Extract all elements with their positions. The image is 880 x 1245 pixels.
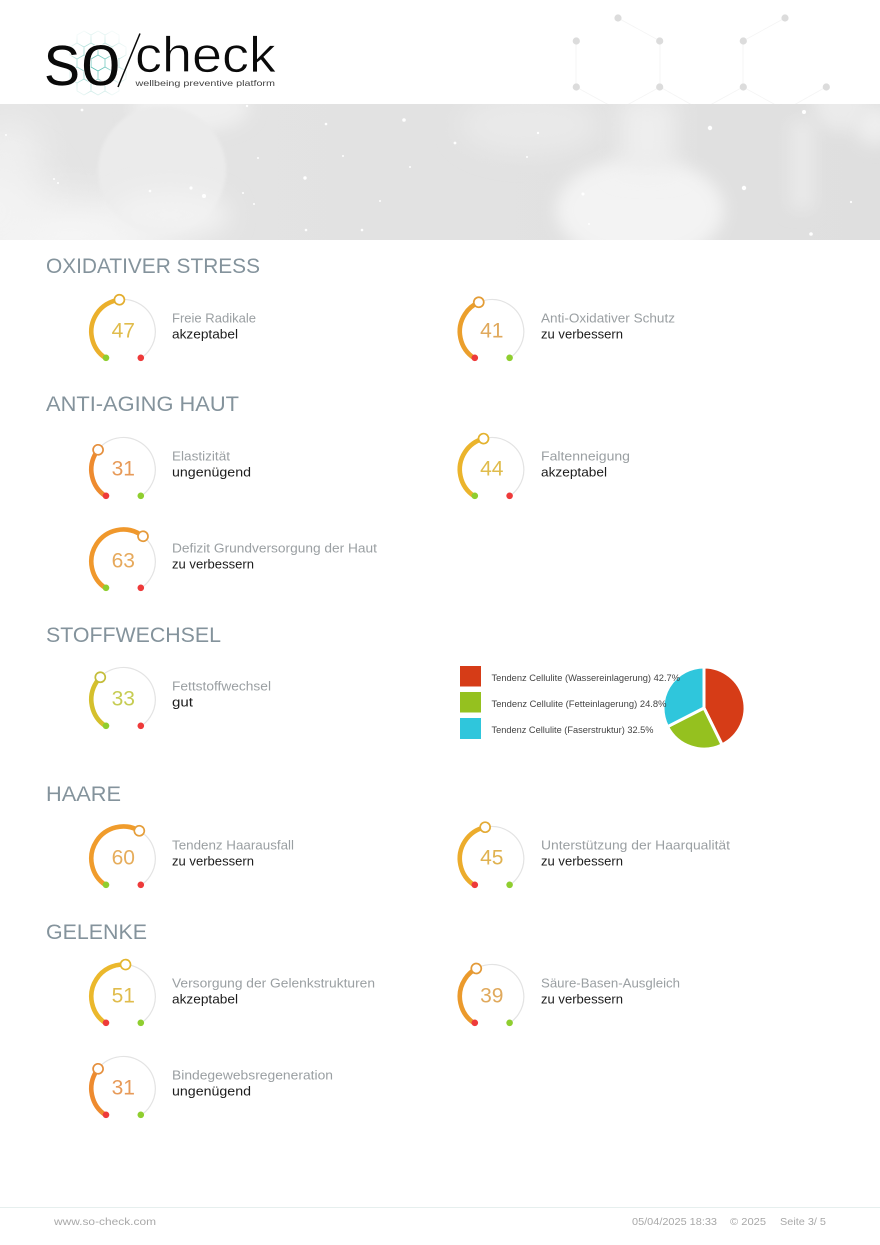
legend: Tendenz Cellulite: Tendenz Cellulite (Faserstruktur) 32.5% — [492, 725, 654, 735]
gauge: Fettstoffwechsel 33: gut — [172, 696, 194, 710]
heading: OXIDATIVER STRESS — [46, 254, 260, 278]
gauge: Elastizität 31: 31 — [112, 458, 135, 480]
gauge: Freie Radikale 47: 47 — [112, 320, 135, 342]
gauge: Defizit Grundversorgung der Haut 63: Defizit Grundversorgung der Haut — [172, 542, 378, 556]
gauge: Defizit Grundversorgung der Haut 63 — [79, 517, 378, 606]
gauge: Fettstoffwechsel 33: 33 — [112, 688, 135, 710]
heading: HAARE — [46, 782, 121, 806]
gauge: Säure-Basen-Ausgleich 39 — [448, 952, 680, 1041]
footer website: www.so-check.com — [53, 1216, 156, 1228]
gauge: Versorgung der Gelenkstrukturen 51 — [79, 952, 375, 1041]
footer date: 05/04/2025 18:33 — [632, 1216, 717, 1228]
footer — [0, 1208, 880, 1228]
gauge: Faltenneigung 44: akzeptabel — [541, 466, 607, 480]
gauge: Säure-Basen-Ausgleich 39: 39 — [480, 984, 503, 1008]
gauge: Versorgung der Gelenkstrukturen 51: Versorgung der Gelenkstrukturen — [172, 976, 375, 990]
heading: ANTI-AGING HAUT — [46, 392, 239, 416]
section: Stoffwechsel — [46, 623, 745, 749]
gauge: Säure-Basen-Ausgleich 39: Säure-Basen-Ausgleich — [541, 976, 680, 990]
logo tagline: wellbeing preventive platform — [134, 78, 275, 88]
gauge: Bindegewebsregeneration 31 — [79, 1044, 333, 1133]
gauge: Anti-Oxidativer Schutz 41: Anti-Oxidativer Schutz — [541, 312, 675, 326]
section: Anti-Aging Haut — [46, 392, 630, 606]
gauge: Fettstoffwechsel 33 — [79, 655, 271, 744]
banner image: grey bokeh — [0, 104, 880, 240]
gauge: Tendenz Haarausfall 60: zu verbessern — [172, 854, 254, 868]
gauge: Versorgung der Gelenkstrukturen 51: 51 — [112, 984, 135, 1008]
legend: Tendenz Cellulite: Tendenz Cellulite (Wassereinlagerung) 42.7% — [492, 673, 680, 683]
legend: Tendenz Cellulite: Tendenz Cellulite (Fetteinlagerung) 24.8% — [492, 699, 667, 709]
icon: molecule decoration top right — [573, 14, 830, 110]
section: Haare — [46, 782, 731, 903]
gauge: Säure-Basen-Ausgleich 39: zu verbessern — [541, 992, 623, 1006]
gauge: Defizit Grundversorgung der Haut 63: zu verbessern — [172, 558, 254, 572]
heading: STOFFWECHSEL — [46, 623, 221, 647]
section: Gelenke — [46, 920, 680, 1133]
gauge: Defizit Grundversorgung der Haut 63: 63 — [112, 550, 135, 572]
gauge: Freie Radikale 47: akzeptabel — [172, 328, 238, 342]
gauge: Anti-Oxidativer Schutz 41: zu verbessern — [541, 328, 623, 342]
gauge: Elastizität 31: ungenügend — [172, 466, 251, 480]
gauge: Freie Radikale 47: Freie Radikale — [172, 312, 256, 326]
gauge: Fettstoffwechsel 33: Fettstoffwechsel — [172, 680, 271, 694]
section: Oxidativer Stress — [46, 254, 675, 376]
logo: so/check — [44, 18, 277, 102]
gauge: Faltenneigung 44: Faltenneigung — [541, 450, 630, 464]
gauge: Freie Radikale 47 — [79, 287, 256, 376]
logo wordmark: check: check — [135, 27, 277, 83]
gauge: Unterstützung der Haarqualität 45: Unterstützung der Haarqualität — [541, 838, 731, 852]
gauge: Anti-Oxidativer Schutz 41: 41 — [480, 320, 503, 342]
gauge: Elastizität 31 — [79, 425, 251, 514]
footer copyright: © 2025 — [730, 1216, 766, 1228]
gauge: Tendenz Haarausfall 60 — [79, 814, 294, 903]
heading: GELENKE — [46, 920, 147, 944]
pie chart: Tendenz Cellulite — [663, 667, 745, 749]
gauge: Bindegewebsregeneration 31: ungenügend — [172, 1084, 251, 1098]
gauge: Anti-Oxidativer Schutz 41 — [448, 287, 675, 376]
gauge: Bindegewebsregeneration 31: Bindegewebsregeneration — [172, 1068, 333, 1082]
footer page number: Seite 3/ 5 — [780, 1216, 826, 1228]
gauge: Versorgung der Gelenkstrukturen 51: akzeptabel — [172, 992, 238, 1006]
icon: hexagon pattern behind logo — [70, 31, 126, 95]
gauge: Faltenneigung 44: 44 — [480, 458, 504, 480]
gauge: Unterstützung der Haarqualität 45: 45 — [480, 846, 503, 870]
gauge: Tendenz Haarausfall 60: Tendenz Haarausfall — [172, 838, 294, 852]
logo slash — [118, 34, 140, 87]
gauge: Faltenneigung 44 — [448, 425, 630, 514]
gauge: Unterstützung der Haarqualität 45: zu verbessern — [541, 854, 623, 868]
gauge: Tendenz Haarausfall 60: 60 — [112, 846, 135, 870]
logo wordmark: so: so — [44, 18, 121, 102]
legend: Tendenz Cellulite — [460, 666, 680, 739]
gauge: Elastizität 31: Elastizität — [172, 450, 231, 464]
gauge: Bindegewebsregeneration 31: 31 — [112, 1076, 135, 1100]
gauge: Unterstützung der Haarqualität 45 — [448, 814, 731, 903]
